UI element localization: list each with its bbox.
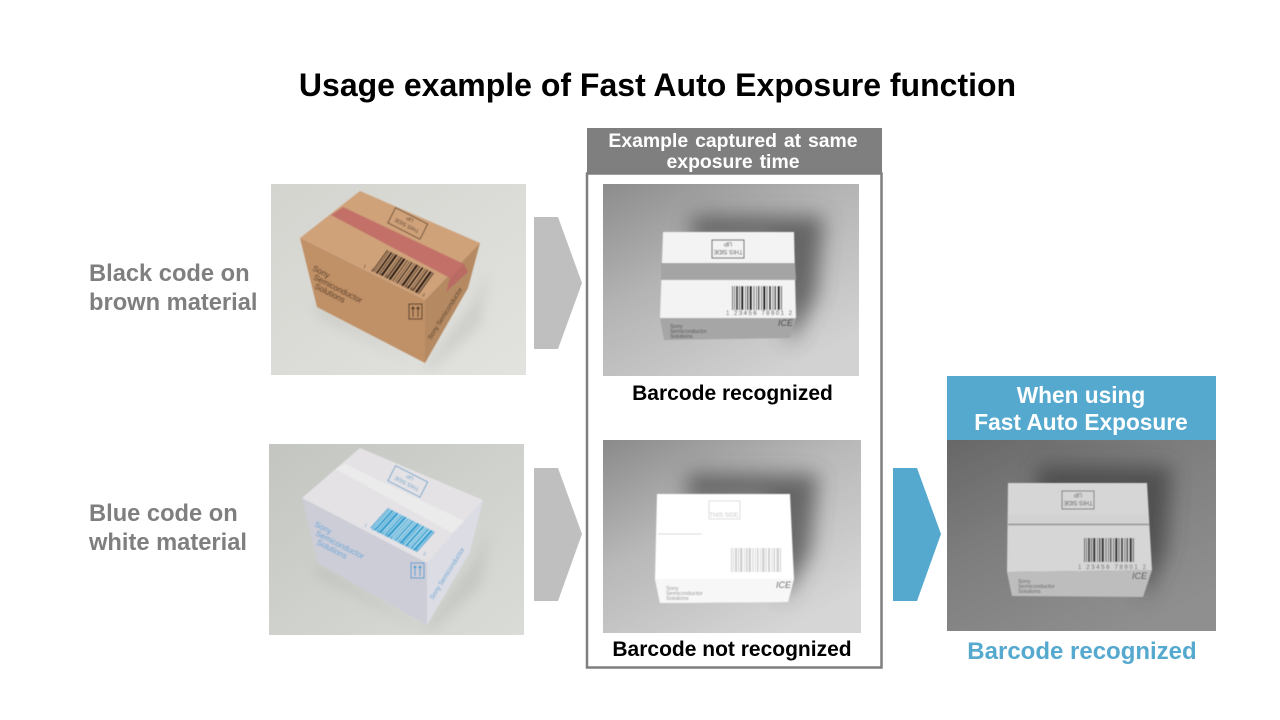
brown box side face — [425, 243, 480, 363]
this way up icon — [409, 304, 422, 319]
panel header: when using fast auto exposure: When using — [1017, 382, 1145, 408]
company text: Sony — [666, 586, 679, 592]
arrow: brown material to capture — [534, 217, 582, 349]
barcode digits: 1 23456 78901 2 — [363, 263, 426, 298]
upside-down side label — [388, 208, 428, 239]
box icon: ICE — [776, 580, 792, 590]
upside-down side label — [388, 466, 428, 497]
side text: Sony Semiconductor — [429, 546, 467, 601]
box icon: ICE — [778, 318, 794, 328]
tape band — [1008, 515, 1149, 525]
label: black code on brown material: Black code on — [89, 261, 250, 287]
brown box front face — [300, 238, 425, 363]
blown-out box — [654, 493, 794, 580]
photo: brown box — [271, 184, 526, 375]
photo: blue code white box — [269, 444, 524, 635]
fold line — [658, 533, 702, 535]
company text: Sony — [311, 264, 331, 280]
panel header: when using fast auto exposure: Fast Auto Exposure — [974, 409, 1188, 435]
company text: Semiconductor — [666, 591, 703, 597]
panel header: example captured at same exposure time — [587, 128, 882, 174]
tape band — [661, 263, 796, 280]
upside-down side label: UP — [405, 214, 415, 223]
title: Usage example of Fast Auto Exposure function — [299, 67, 1016, 103]
washed-out barcode — [731, 548, 781, 572]
brown box top face — [300, 191, 480, 300]
company text: Sony — [1018, 579, 1031, 585]
side label: UP — [1074, 491, 1082, 497]
faint front — [665, 580, 792, 601]
company text: Semiconductor — [670, 329, 707, 335]
arrow: white material to capture — [534, 468, 582, 601]
barcode — [732, 286, 782, 310]
white box side — [427, 500, 483, 625]
caption: barcode recognized with fast auto exposure: Barcode recognized — [967, 638, 1197, 665]
company text: Solutions — [1018, 589, 1041, 595]
white box top — [302, 448, 483, 563]
barcode — [1084, 538, 1134, 562]
side label — [712, 240, 744, 258]
arrow: to fast auto exposure — [893, 468, 941, 601]
box icon: ICE — [1132, 571, 1148, 581]
photo: brown box: Semiconductor — [312, 273, 364, 305]
company text: Sony — [670, 324, 683, 330]
caption: barcode recognized: Barcode recognized — [632, 382, 833, 405]
company text: Solutions — [666, 596, 689, 602]
box top — [1007, 483, 1152, 572]
company text: Sony — [313, 520, 333, 536]
side label — [1062, 491, 1094, 509]
side text: Sony Semiconductor — [427, 286, 465, 341]
company text: Semiconductor — [1018, 584, 1055, 590]
barcode — [370, 508, 435, 552]
photo: brown box: Solutions — [313, 282, 347, 305]
caption: barcode not recognized: Barcode not recognized — [612, 638, 852, 661]
label: blue code on white material: white material — [88, 530, 247, 556]
upside-down side label: UP — [405, 472, 415, 481]
upside-down side label: THIS SIDE — [393, 216, 420, 234]
barcode digits: 1 23456 78901 2 — [364, 522, 427, 557]
barcode digits: 1 23456 78901 2 — [726, 311, 793, 317]
label: blue code on white material: Blue code on — [89, 501, 238, 527]
box front — [660, 318, 796, 340]
upside-down side label: THIS SIDE — [393, 474, 420, 492]
side label: THIS SIDE — [713, 248, 743, 254]
this way up icon — [411, 563, 424, 578]
side label: THIS SIDE — [1063, 499, 1093, 505]
white box front — [302, 498, 427, 625]
box front — [1007, 570, 1152, 597]
tape band — [336, 464, 464, 533]
photo: overexposed capture of white box — [603, 440, 861, 633]
barcode digits: 1 23456 78901 2 — [1078, 565, 1147, 571]
photo: fast auto exposure capture — [947, 440, 1216, 631]
label: black code on brown material: brown material — [89, 290, 257, 316]
photo: blue code white box: Semiconductor — [314, 529, 366, 561]
company text: Solutions — [670, 334, 693, 340]
panel header: when using fast auto exposure — [947, 376, 1216, 440]
panel: same exposure time frame — [587, 174, 882, 668]
panel header: example captured at same exposure time: Example captured at same — [608, 130, 858, 152]
photo: overexposed capture of white box: THIS SIDE — [709, 513, 739, 519]
photo: grayscale capture of brown box — [603, 184, 859, 376]
barcode — [372, 250, 434, 294]
panel header: example captured at same exposure time: exposure time — [667, 151, 800, 173]
faint label — [709, 501, 740, 519]
red tape — [331, 207, 464, 278]
side label: UP — [724, 240, 732, 246]
box top — [660, 232, 796, 318]
photo: blue code white box: Solutions — [315, 538, 349, 561]
